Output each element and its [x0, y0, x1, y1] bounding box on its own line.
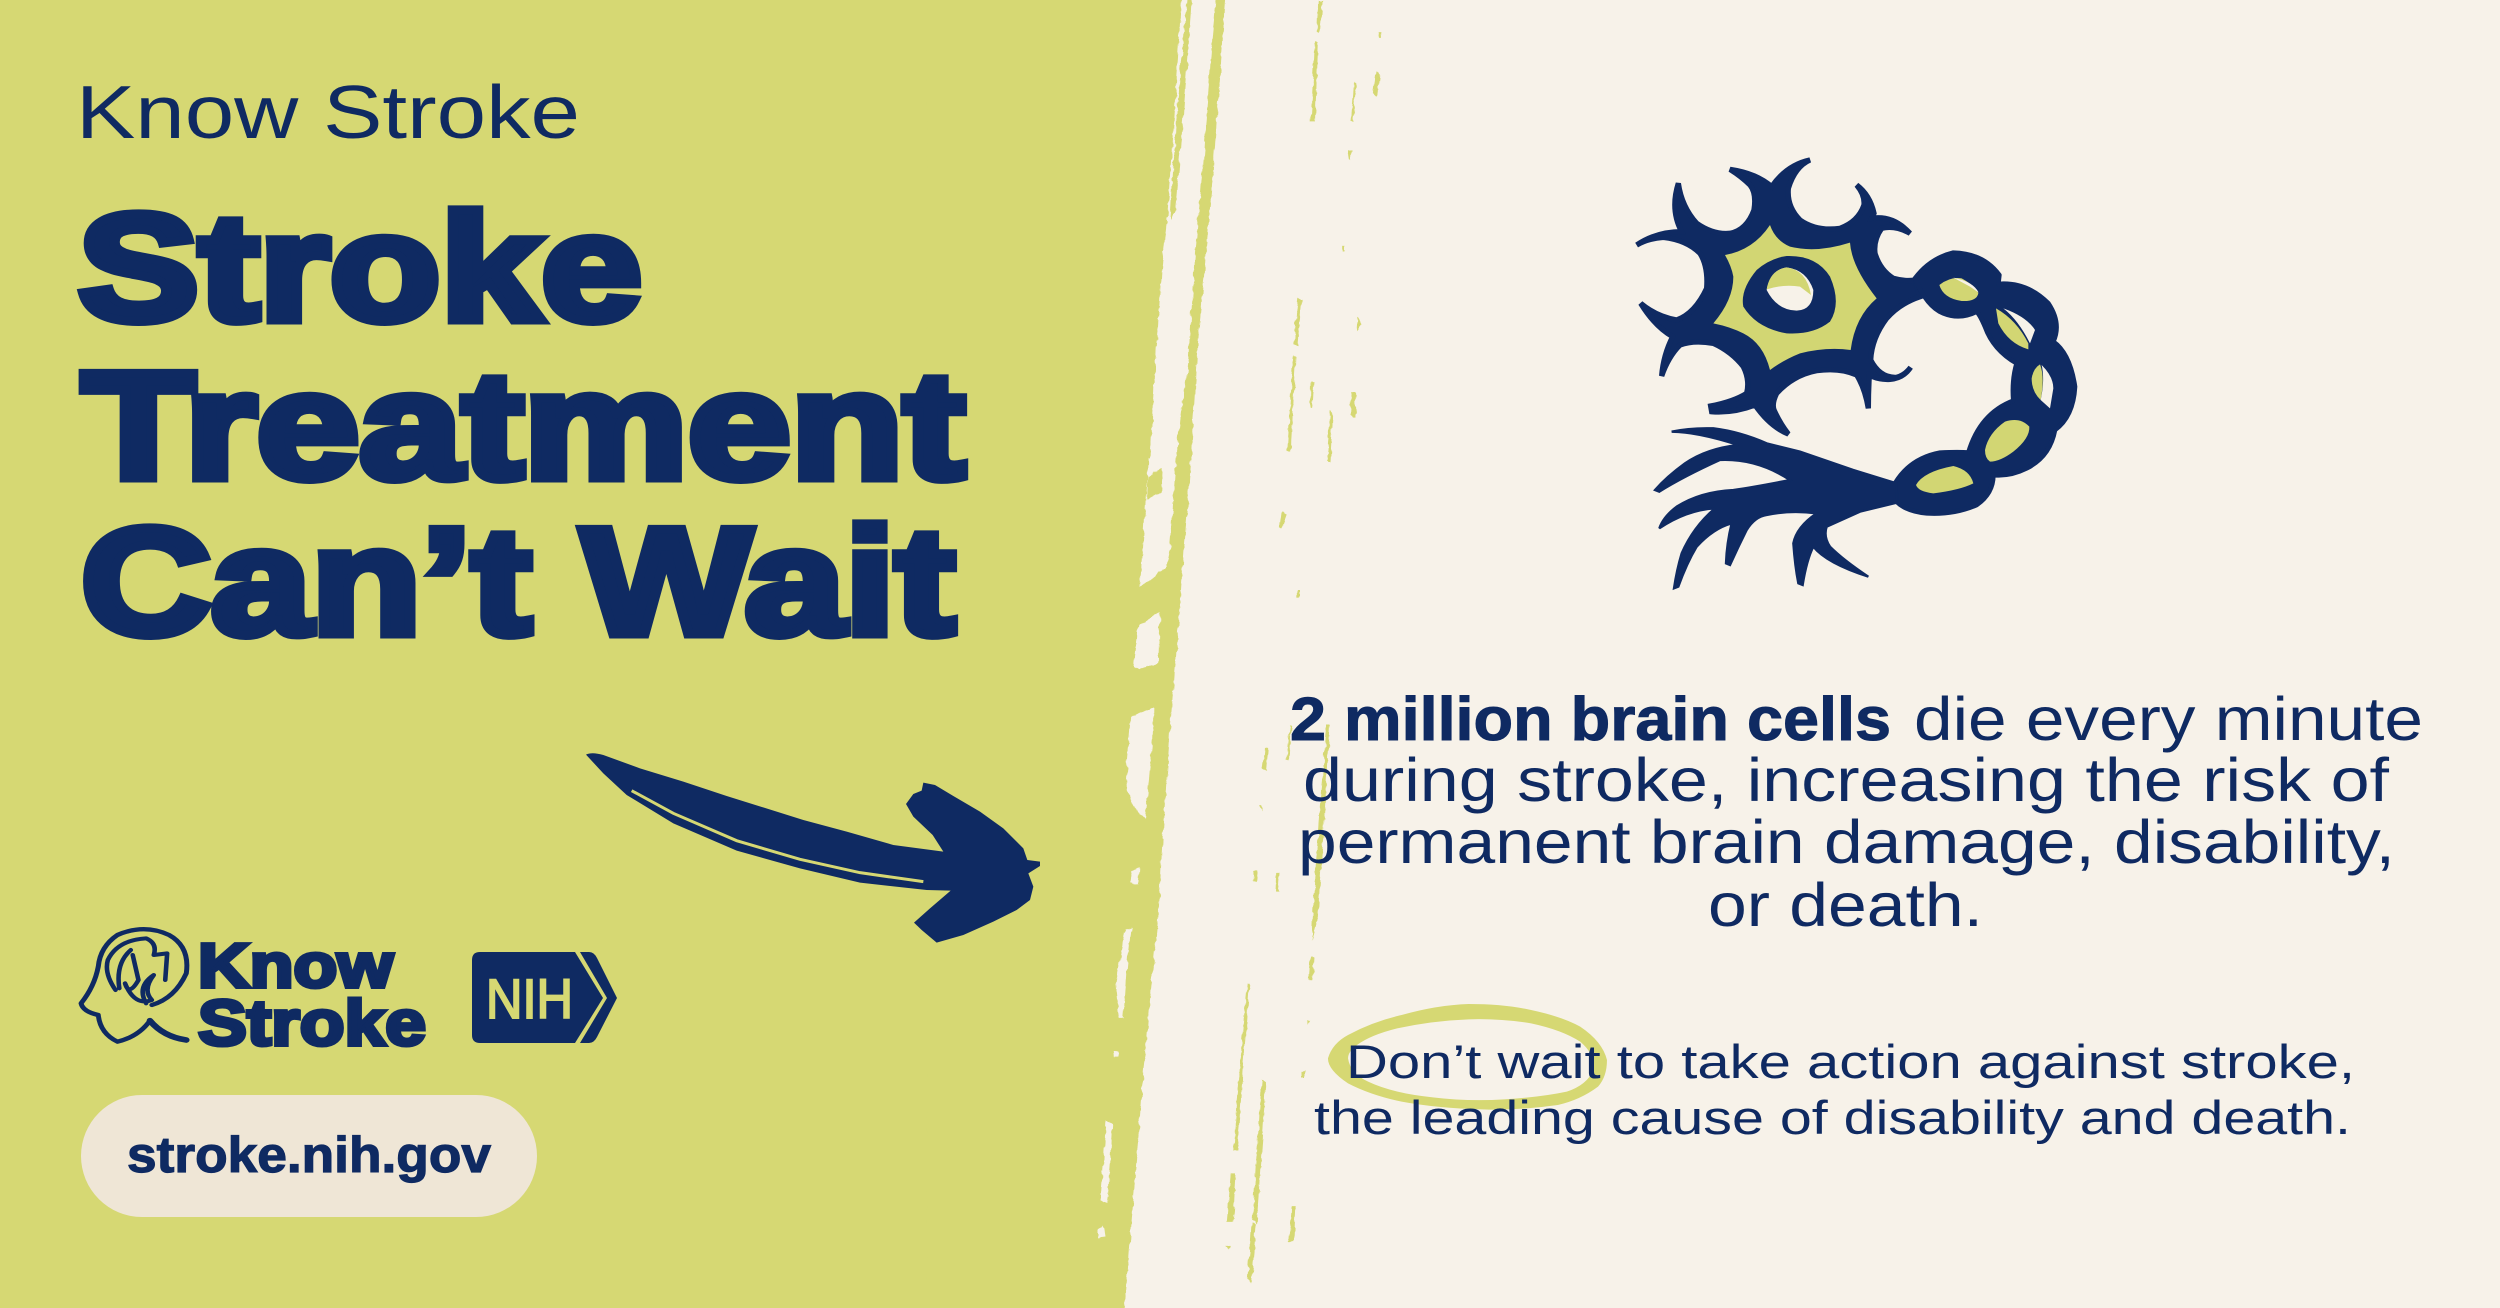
logo: NIH: NIH	[486, 967, 573, 1030]
title	[78, 183, 965, 667]
text block: main statistic: or death.	[1708, 871, 1983, 939]
callout: brush circle around Don't wait	[1328, 1004, 1607, 1110]
text block: main statistic: 2 million brain cells	[1290, 685, 1891, 753]
logo: Know Stroke	[81, 929, 426, 1059]
text block: call to action	[1314, 1035, 2355, 1144]
small heading: Know Stroke: Know Stroke	[76, 70, 580, 154]
title: Can’t Wait	[81, 497, 955, 667]
bead holes	[1939, 278, 1978, 301]
nucleus	[1743, 256, 1836, 334]
text block: main statistic	[1290, 685, 2423, 939]
logo: NIH	[472, 952, 617, 1043]
icon: neuron	[1637, 160, 2075, 588]
speckles	[1225, 0, 1382, 1283]
title: Stroke	[78, 183, 642, 353]
dendrite crescents	[1637, 160, 1920, 434]
text block: main statistic: permanent brain damage, disability,	[1298, 808, 2395, 876]
text block: call to action: the leading cause of disability and death.	[1314, 1091, 2351, 1144]
logo: Know Stroke: Stroke	[198, 987, 426, 1059]
text block: main statistic: die every minute	[1914, 685, 2423, 753]
url pill	[81, 1095, 537, 1217]
arrow	[586, 753, 1040, 943]
text block: main statistic: during stroke, increasing the risk of	[1303, 746, 2390, 814]
panel: green brush background	[927, 0, 1382, 1308]
axon terminal	[1655, 428, 1897, 588]
title: Treatment	[82, 341, 965, 511]
logo: Know Stroke: Know	[198, 932, 394, 1001]
icon: head with brain scribble	[81, 929, 187, 1042]
url pill: stroke.nih.gov	[127, 1127, 491, 1183]
axon beads	[1895, 253, 2075, 514]
soma fill	[1713, 225, 1877, 370]
text block: call to action: Don’t wait to take action against stroke,	[1346, 1035, 2355, 1088]
